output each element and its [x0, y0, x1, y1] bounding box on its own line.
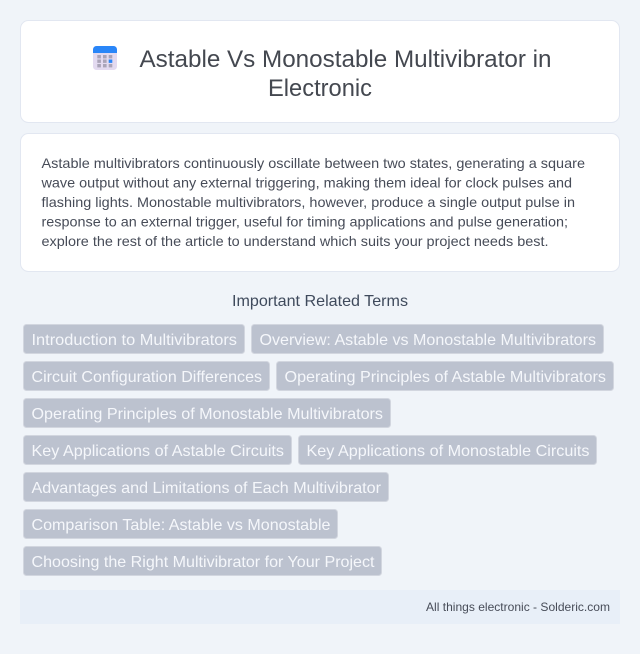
- chip: astable applications: [24, 436, 292, 464]
- title: Electronic: [268, 75, 372, 102]
- chip: monostable principles: [24, 398, 390, 428]
- chip: advantages: Advantages and Limitations of Each Multivibrator: [32, 480, 382, 497]
- heading: important related terms: Important Related Terms: [232, 293, 408, 310]
- chip: astable applications: Key Applications of Astable Circuits: [32, 443, 284, 460]
- chip: overview: Overview: Astable vs Monostable Multivibrators: [260, 332, 596, 349]
- title: Astable Vs Monostable Multivibrator in: [140, 46, 552, 73]
- chip: introduction: Introduction to Multivibrators: [32, 332, 237, 349]
- panel: summary text: wave output without any external triggering, making them ideal for clock pulses and: [40, 174, 572, 190]
- chip: introduction: [24, 324, 244, 354]
- term chips: [24, 324, 614, 576]
- panel: title card: [20, 20, 620, 122]
- panel: summary text: response to an external trigger, useful for timing applications and pulse generation;: [42, 214, 568, 230]
- panel: summary text: explore the rest of the article to understand which suits your project needs best.: [42, 233, 548, 249]
- chip: comparison table: Comparison Table: Astable vs Monostable: [32, 517, 331, 534]
- panel: summary text: Astable multivibrators continuously oscillate between two states, generating a square: [42, 155, 585, 171]
- panel: summary text: [20, 134, 620, 272]
- title: [140, 46, 552, 102]
- chip: overview: [252, 324, 604, 354]
- chip: choosing: Choosing the Right Multivibrator for Your Project: [32, 554, 375, 571]
- chip: astable principles: [276, 362, 614, 390]
- icon: calendar: [93, 46, 117, 70]
- chip: circuit configuration: Circuit Configuration Differences: [32, 369, 262, 386]
- footer: [20, 590, 620, 624]
- chip: circuit configuration: [24, 362, 270, 390]
- chip: monostable applications: [298, 436, 596, 464]
- chip: astable principles: Operating Principles of Astable Multivibrators: [284, 369, 606, 386]
- panel: summary text: flashing lights. Monostable multivibrators, however, produce a single output pulse in: [42, 194, 575, 210]
- chip: choosing: [24, 546, 382, 576]
- chip: monostable principles: Operating Principles of Monostable Multivibrators: [32, 406, 383, 423]
- chip: advantages: [24, 472, 388, 502]
- chip: monostable applications: Key Applications of Monostable Circuits: [306, 443, 590, 460]
- footer: All things electronic - Solderic.com: [426, 600, 610, 614]
- chip: comparison table: [24, 510, 338, 538]
